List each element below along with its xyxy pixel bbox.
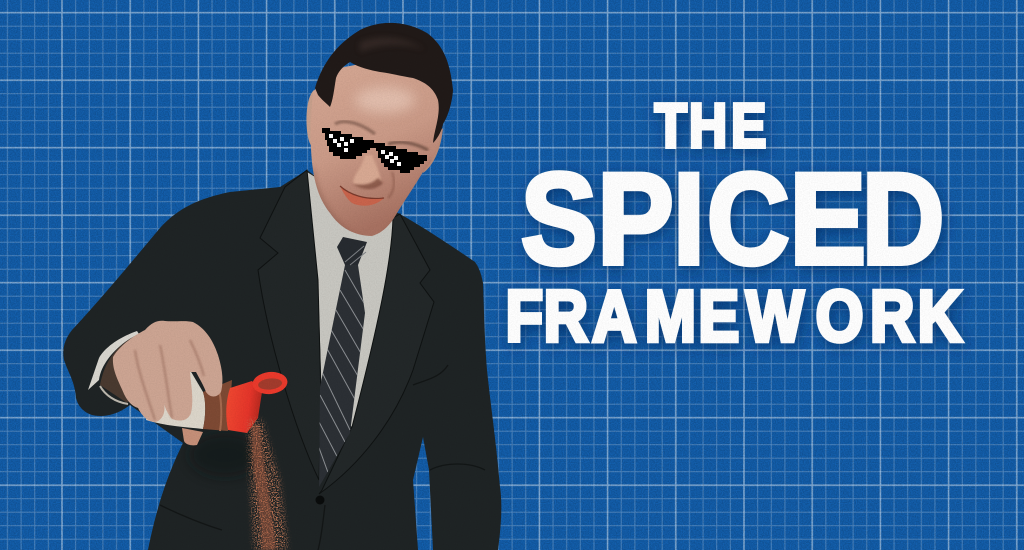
right lapel [319,214,434,494]
face [311,60,441,236]
man in suit [63,23,501,550]
forehead highlight [355,87,415,113]
jar label [146,370,205,429]
hand [113,321,222,422]
necktie [318,237,368,487]
right ear [423,128,443,173]
falling spice [248,420,288,550]
thumb [182,428,203,445]
jacket folds [160,365,485,550]
jacket [63,170,501,550]
spice jar [146,370,289,433]
title line: FRAMEWORK: FRAMEWORK [506,277,962,357]
title line: THE: THE [655,92,766,161]
left lapel [258,170,321,480]
left ear [306,90,321,148]
hair sheen [360,37,425,52]
title [506,92,962,357]
shirt cuff [88,331,139,390]
shirt cuff lower edge [100,386,128,404]
shadow under hand [189,433,261,477]
jar cap [226,381,262,433]
head [300,23,453,250]
hair [315,23,453,143]
lip line [340,186,384,198]
nose [353,155,381,188]
jar rim [218,386,221,431]
cheek shading [313,168,350,230]
eyebrows [335,122,375,134]
smile crease [388,172,394,198]
pixel sunglasses [322,128,427,173]
finger lines [135,340,204,420]
title line: SPICED: SPICED [521,146,944,291]
cap lid [251,370,289,396]
mouth [340,186,384,206]
shirt [307,172,393,427]
button [316,496,324,504]
sleeve interior [100,334,140,403]
jar body [203,380,232,431]
